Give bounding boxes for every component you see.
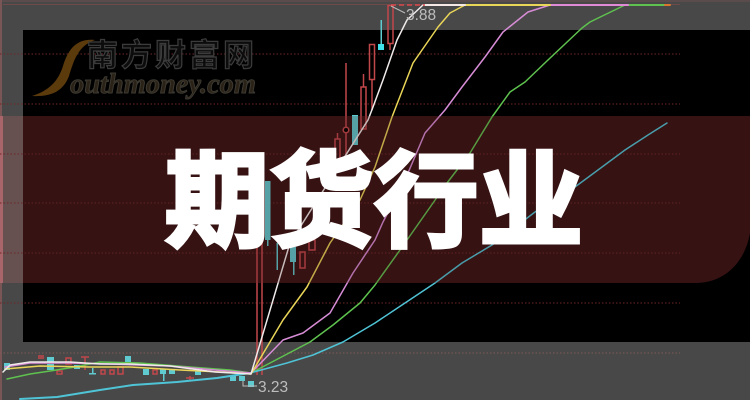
chart: low marker: 3.23 xyxy=(258,379,288,396)
band tint over chart xyxy=(23,116,750,283)
title: 期货行业 xyxy=(165,145,583,261)
icon: brown swoosh xyxy=(32,40,95,96)
watermark domain: outhmoney.com xyxy=(70,68,256,100)
chart: candlesticks xyxy=(4,6,393,387)
panel: dark red title band xyxy=(0,116,750,283)
chart: peak marker: 3.88 xyxy=(406,7,436,24)
line: white MA xyxy=(3,5,465,374)
line: yellow MA xyxy=(5,5,550,374)
chart: peak marker xyxy=(391,5,436,24)
chart: low marker xyxy=(243,379,288,396)
line: pink MA xyxy=(5,5,628,373)
watermark: Southmoney logo xyxy=(32,38,256,100)
line: cyan MA xyxy=(250,123,667,373)
watermark name: 南方财富网 xyxy=(87,38,254,73)
